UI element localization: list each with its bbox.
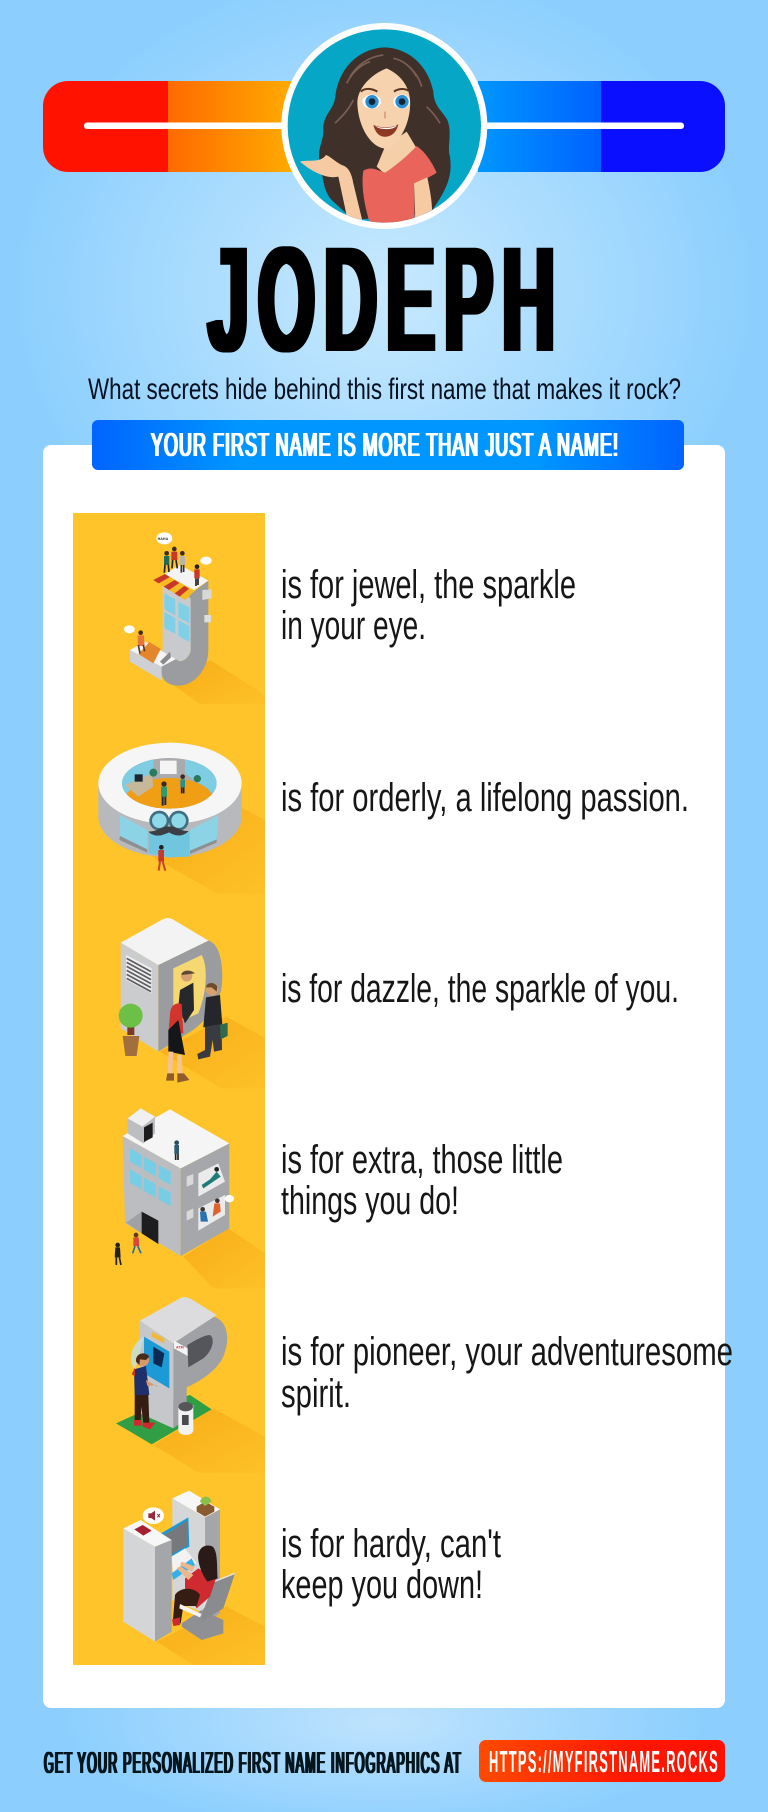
text: H line: is for hardy, can't	[281, 1522, 501, 1566]
icon: letter J building	[124, 532, 265, 704]
icon: letter O building with glasses	[98, 743, 265, 893]
text: J line: in your eye.	[281, 604, 426, 648]
icon: letter J building: HAHA	[158, 537, 169, 541]
icon: letter E building	[115, 1108, 265, 1288]
footer button: URL	[479, 1740, 725, 1782]
icon: letter P ATM: ATM	[176, 1346, 184, 1350]
text: E line	[281, 1138, 563, 1223]
text: P line: spirit.	[281, 1372, 351, 1416]
text: J line: is for jewel, the sparkle	[281, 563, 576, 607]
text: E line: is for extra, those little	[281, 1138, 563, 1182]
avatar: smiling woman in circle	[281, 23, 487, 229]
panel: white content card	[43, 445, 725, 1708]
icon: letter H desk	[123, 1491, 265, 1665]
text: E line: things you do!	[281, 1179, 459, 1223]
icon: letter D building	[119, 918, 265, 1088]
icon: letter P ATM	[116, 1297, 265, 1473]
text: P line	[281, 1330, 733, 1416]
header bar: gradient ribbon	[43, 81, 725, 172]
text: J line	[281, 563, 576, 648]
banner	[92, 420, 684, 470]
text: H line: keep you down!	[281, 1563, 483, 1607]
text: H line	[281, 1522, 501, 1607]
panel: yellow illustration strip	[73, 513, 265, 1665]
